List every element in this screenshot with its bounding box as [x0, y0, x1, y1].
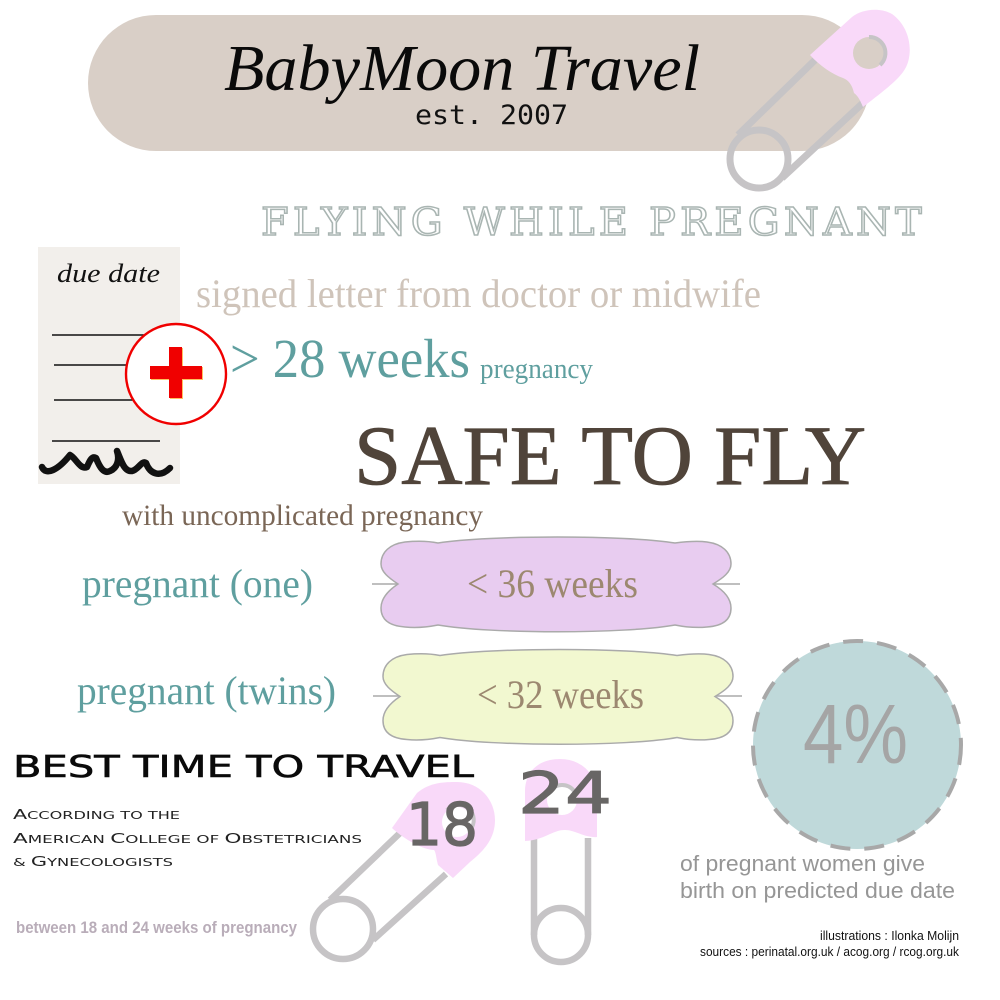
icon: header safety pin: [730, 10, 910, 188]
icon: medical cross: [126, 324, 226, 424]
icon: safety pin 18: 18: [406, 790, 478, 859]
credits: illustrations : Ilonka Molijn: [820, 929, 959, 943]
text: signed letter: signed letter from doctor or midwife: [196, 271, 761, 316]
credits: [700, 929, 960, 959]
panel: doctor's letter: [38, 247, 180, 484]
heading: safe to fly: SAFE TO FLY: [354, 409, 866, 503]
badge: under 36 weeks: [372, 537, 740, 632]
text: between 18 and 24 weeks: between 18 and 24 weeks of pregnancy: [16, 919, 298, 937]
icon: safety pin 24: [518, 759, 612, 962]
icon: safety pin 18: [313, 782, 495, 959]
icon: safety pin 24: 24: [518, 761, 612, 827]
text: according to ACOG: A CCORDING TO THE: [13, 807, 180, 823]
title: BabyMoon Travel: [224, 32, 700, 105]
label: pregnant twins: pregnant (twins): [77, 668, 336, 713]
established year: est. 2007: [415, 100, 568, 131]
callout: 4 percent: [753, 641, 961, 849]
badge: under 32 weeks: [373, 650, 742, 744]
text: due date statistic: [680, 851, 955, 903]
heading: flying while pregnant: FLYING WHILE PREGNANT: [261, 200, 926, 244]
credits: sources : perinatal.org.uk / acog.org / rcog.org.uk: [700, 945, 960, 959]
text: due date statistic: of pregnant women give: [680, 851, 925, 876]
due date label: due date: [57, 259, 160, 288]
badge: under 32 weeks: < 32 weeks: [477, 672, 644, 717]
text: due date statistic: birth on predicted due date: [680, 878, 955, 903]
heading: best time to travel: BEST TIME TO TRAVEL: [13, 750, 474, 785]
text: according to ACOG: [13, 807, 363, 870]
text: uncomplicated pregnancy: with uncomplicated pregnancy: [122, 499, 483, 532]
callout: 4 percent: 4%: [803, 687, 908, 781]
text: pregnancy: pregnancy: [480, 353, 593, 385]
header banner: [88, 10, 910, 188]
badge: under 36 weeks: < 36 weeks: [467, 561, 638, 606]
signature scribble: [42, 451, 170, 474]
text: according to ACOG: & G YNECOLOGISTS: [13, 854, 174, 870]
text: over 28 weeks: > 28 weeks: [230, 328, 470, 389]
label: pregnant one: pregnant (one): [82, 561, 313, 606]
text: according to ACOG: A MERICAN C OLLEGE OF O BSTETRICIANS: [13, 831, 363, 847]
